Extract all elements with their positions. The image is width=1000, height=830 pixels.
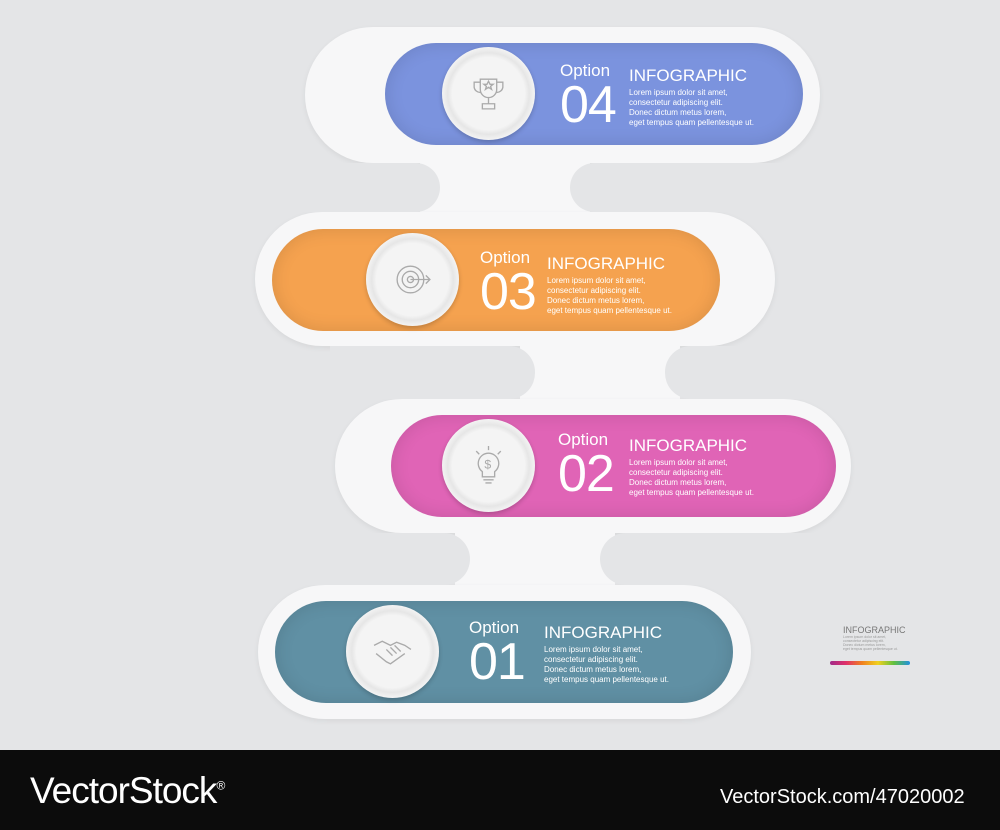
legend: small infographic: Donec dictum metus lorem, xyxy=(843,643,886,647)
text: option 02: Option xyxy=(558,430,608,449)
panel: option 03: INFOGRAPHIC xyxy=(547,254,665,273)
text: option 01: Option xyxy=(469,618,519,637)
text: option 01: 01 xyxy=(469,633,525,691)
icon: handshake xyxy=(346,605,439,698)
panel: option 01: INFOGRAPHIC xyxy=(544,623,662,642)
panel: option 02: INFOGRAPHIC xyxy=(629,436,747,455)
panel: option 02: Donec dictum metus lorem, xyxy=(629,478,726,487)
panel: option 01 xyxy=(275,601,733,703)
panel: option 03: eget tempus quam pellentesque ut. xyxy=(547,306,672,315)
footer band: VectorStock.com/47020002 xyxy=(720,786,965,808)
legend: small infographic: Lorem ipsum dolor sit amet, xyxy=(843,635,886,639)
panel: option 04: eget tempus quam pellentesque ut. xyxy=(629,118,754,127)
panel: option 02: consectetur adipiscing elit. xyxy=(629,468,723,477)
legend: small infographic: eget tempus quam pellentesque ut. xyxy=(843,647,898,651)
legend: small infographic xyxy=(830,625,910,665)
panel: option 04: Donec dictum metus lorem, xyxy=(629,108,726,117)
panel: option 04: INFOGRAPHIC xyxy=(629,66,747,85)
text: option 04: Option xyxy=(560,61,610,80)
panel: option 04 xyxy=(385,43,803,145)
panel: option 02: eget tempus quam pellentesque ut. xyxy=(629,488,754,497)
panel: option 03: Donec dictum metus lorem, xyxy=(547,296,644,305)
panel: option 03: consectetur adipiscing elit. xyxy=(547,286,641,295)
panel: option 01: consectetur adipiscing elit. xyxy=(544,655,638,664)
panel: option 03 xyxy=(272,229,720,331)
icon: lightbulb dollar xyxy=(442,419,535,512)
text: option 02: 02 xyxy=(558,445,614,503)
panel: option 04: consectetur adipiscing elit. xyxy=(629,98,723,107)
text: option 04: 04 xyxy=(560,76,616,134)
panel: option 02: Lorem ipsum dolor sit amet, xyxy=(629,458,728,467)
text: option 03: 03 xyxy=(480,263,536,321)
panel: option 01: Donec dictum metus lorem, xyxy=(544,665,641,674)
icon: trophy xyxy=(442,47,535,140)
text: option 03: Option xyxy=(480,248,530,267)
panel: option 04: Lorem ipsum dolor sit amet, xyxy=(629,88,728,97)
panel: option 03: Lorem ipsum dolor sit amet, xyxy=(547,276,646,285)
legend: small infographic: INFOGRAPHIC xyxy=(843,625,906,635)
icon: target xyxy=(366,233,459,326)
footer band xyxy=(0,750,1000,830)
panel: option 01: Lorem ipsum dolor sit amet, xyxy=(544,645,643,654)
panel: option 02 xyxy=(391,415,836,517)
panel: option 01: eget tempus quam pellentesque ut. xyxy=(544,675,669,684)
icon: lightbulb dollar: $ xyxy=(484,458,491,472)
legend: small infographic: consectetur adipiscing elit. xyxy=(843,639,884,643)
footer band: VectorStock® xyxy=(30,770,224,811)
